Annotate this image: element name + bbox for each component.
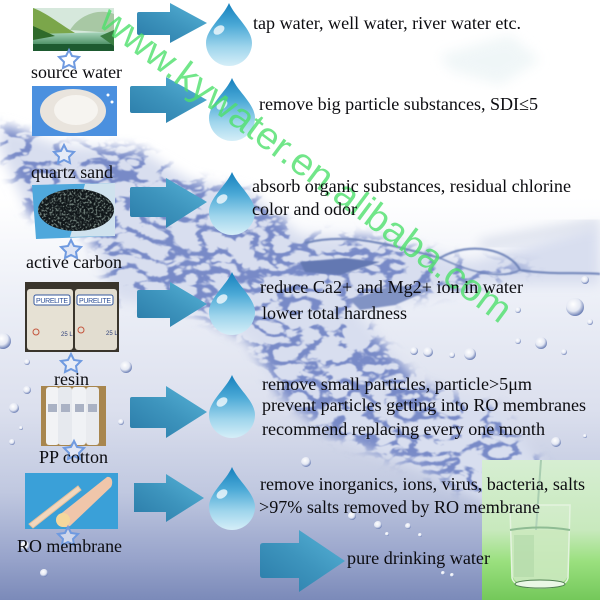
image: RO membrane <box>25 473 118 529</box>
star <box>58 527 78 545</box>
image: PP cotton <box>41 386 106 446</box>
image: source water <box>33 8 114 51</box>
image: resin bags: PURELITE <box>36 298 68 305</box>
text: active carbon description: color and odor <box>252 199 357 219</box>
text: source water description: tap water, well water, river water etc. <box>253 13 521 33</box>
text: PP cotton description <box>262 374 586 439</box>
image: active carbon <box>32 183 115 239</box>
arrow 1 <box>137 3 207 43</box>
arrow 3 <box>130 178 207 228</box>
icon: water drop 6 <box>209 467 255 530</box>
star <box>61 240 81 258</box>
star <box>54 145 74 163</box>
arrow 4 <box>137 282 207 327</box>
text: resin description: reduce Ca2+ and Mg2+ ion in water <box>260 277 523 297</box>
icon: water drop 1 <box>206 3 252 66</box>
text: RO membrane description <box>259 474 585 517</box>
image: glass of pure water <box>482 460 600 600</box>
star <box>61 354 81 372</box>
arrow 6 <box>134 474 204 522</box>
text: RO membrane description: >97% salts removed by RO membrane <box>259 497 540 517</box>
image: quartz sand <box>32 86 117 136</box>
text: quartz sand description: remove big particle substances, SDI≤5 <box>259 94 538 114</box>
water splash background <box>0 35 600 510</box>
text: resin description <box>260 277 523 323</box>
text: resin description: lower total hardness <box>262 303 407 323</box>
icon: water drop 2 <box>209 78 255 141</box>
text: PP cotton description: remove small particles, particle>5μm <box>262 374 532 394</box>
label: RO membrane: RO membrane <box>17 536 122 556</box>
icon: water drop 5 <box>209 375 255 438</box>
watermark: www.kywater.en.alibaba.com <box>91 0 520 332</box>
image: resin bags <box>25 282 119 352</box>
label: PP cotton: PP cotton <box>39 447 108 467</box>
arrow 5 <box>130 386 207 438</box>
text: active carbon description <box>252 176 571 219</box>
arrow 2 <box>130 77 207 123</box>
text: active carbon description: absorb organic substances, residual chlorine <box>252 176 571 196</box>
star <box>64 441 84 459</box>
text: pure drinking water: pure drinking water <box>347 548 490 568</box>
icon: water drop 4 <box>209 272 255 335</box>
label: resin: resin <box>54 369 89 389</box>
image: resin bags: PURELITE <box>79 298 111 305</box>
arrow 7 <box>260 530 345 592</box>
bubbles <box>0 276 593 577</box>
label: source water: source water <box>31 62 122 82</box>
image: resin bags: 25 L <box>106 331 118 337</box>
label: quartz sand: quartz sand <box>31 162 113 182</box>
text: PP cotton description: recommend replacing every one month <box>262 419 545 439</box>
icon: water drop 3 <box>209 172 255 235</box>
star <box>59 50 79 68</box>
label: active carbon: active carbon <box>26 252 122 272</box>
text: RO membrane description: remove inorganics, ions, virus, bacteria, salts <box>260 474 585 494</box>
text: PP cotton description: prevent particles getting into RO membranes <box>262 395 586 415</box>
image: resin bags: 25 L <box>61 332 73 338</box>
